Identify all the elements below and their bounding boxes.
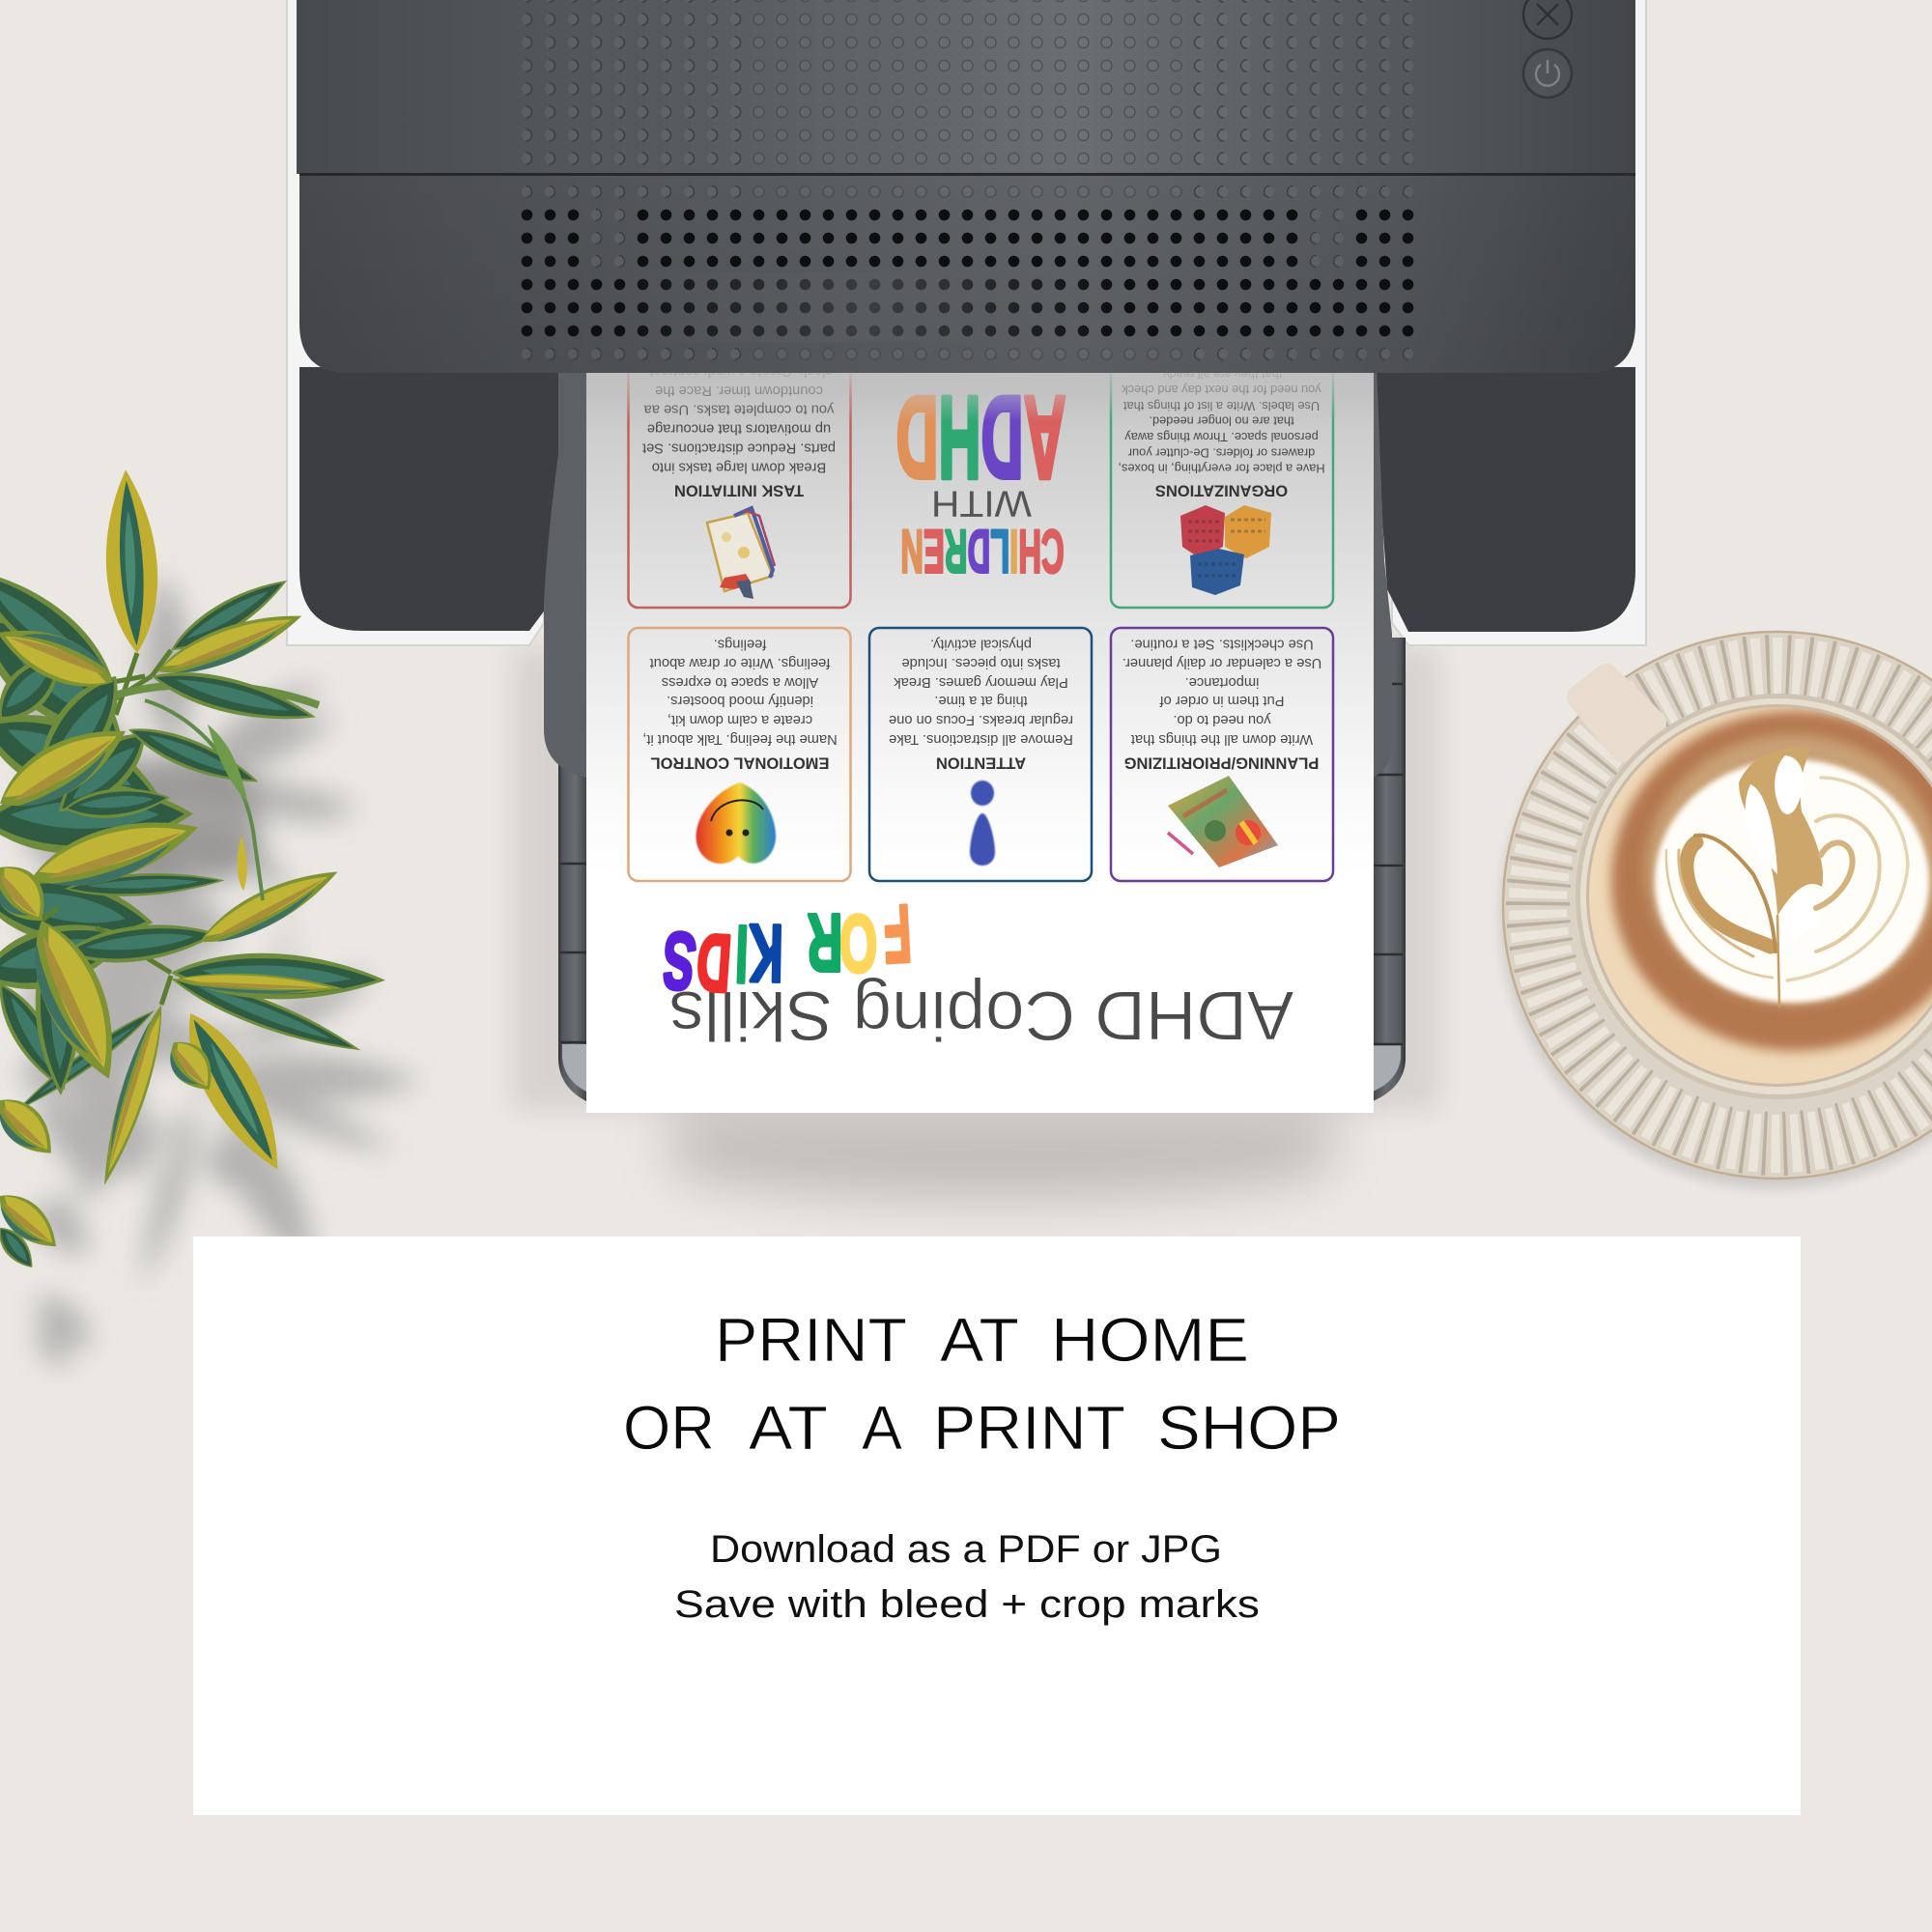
- heading: AT: [940, 1305, 1019, 1375]
- text: organizations: that they are all ready.: [1161, 367, 1282, 382]
- text: attention: physical activity.: [930, 636, 1032, 651]
- icon: power button: [1523, 49, 1572, 98]
- subheading: Save with bleed + crop marks: [674, 1583, 1260, 1626]
- icon: rainbow heart brain: [696, 782, 776, 864]
- text: emotional control: feelings. Write or draw about: [650, 655, 830, 670]
- card: attention: [869, 628, 1092, 881]
- title: for kids: F: [881, 888, 913, 979]
- title: for kids: K: [749, 907, 783, 999]
- printer right paper tray: [1373, 638, 1406, 1101]
- card: organizations: [1111, 348, 1333, 608]
- text: planning: Use checklists. Set a routine.: [1130, 636, 1314, 651]
- heading: PRINT: [933, 1393, 1125, 1463]
- card: planning: [1111, 628, 1333, 881]
- icon: cancel button: [1523, 0, 1572, 39]
- text: emotional control: create a calm down kit,: [668, 712, 812, 727]
- plant gap shadow: [106, 753, 261, 889]
- text: planning: Write down all the things that: [1131, 731, 1313, 747]
- top fade on paper: [627, 373, 1335, 418]
- plant: [0, 469, 386, 1274]
- text panel: [193, 1236, 1801, 1815]
- text: task initiation: countdown timer. Race the: [655, 383, 823, 398]
- title: for kids: I: [734, 908, 750, 999]
- text: attention: thing at a time.: [934, 693, 1028, 708]
- paper shadow: [667, 1111, 1343, 1199]
- text: organizations: personal space. Throw things away: [1124, 430, 1319, 444]
- text: emotional control: Name the feeling. Talk about it,: [642, 731, 838, 747]
- printer right wing: [1372, 367, 1635, 632]
- heading: A: [862, 1393, 902, 1463]
- text: emotional control: Allow a space to express: [662, 674, 818, 690]
- title: for kids: [663, 903, 911, 994]
- text: task initiation: you to complete tasks. Use aa: [643, 402, 834, 417]
- upper vent holes: [516, 0, 1420, 170]
- text: emotional control: identify mood boosters.: [667, 693, 813, 708]
- title: for kids: R: [808, 897, 842, 988]
- title: for kids: O: [838, 897, 878, 990]
- printer body: [544, 367, 1392, 778]
- text: organizations: Have a place for everything, in boxes,: [1118, 462, 1325, 475]
- printer: [287, 0, 1646, 1101]
- icon: clipboard: [707, 508, 775, 599]
- text: planning: Put them in order of: [1159, 693, 1285, 708]
- printer white backing: [287, 0, 1646, 645]
- text: emotional control: [642, 636, 838, 747]
- heading: PRINT: [715, 1305, 907, 1375]
- lower vent holes dark: [516, 203, 1420, 342]
- text: planning: you need to do.: [1173, 712, 1271, 727]
- text: planning: importance.: [1185, 674, 1259, 690]
- icon: notebook: [1168, 776, 1278, 867]
- heading: task initiation: TASK INITIATION: [674, 481, 804, 498]
- text: emotional control: feelings.: [714, 636, 766, 651]
- printer upper panel: [297, 0, 1635, 174]
- cup handle: [1579, 676, 1654, 750]
- latte art: [1666, 748, 1908, 1007]
- heading: SHOP: [1157, 1393, 1341, 1463]
- coffee: [1589, 707, 1932, 1084]
- heading: planning/prioritizing: PLANNING/PRIORITIZING: [1124, 753, 1319, 771]
- text: task initiation: [642, 363, 836, 475]
- card: emotional control: [628, 628, 850, 881]
- text: task initiation: up motivators that encourage: [647, 421, 831, 437]
- cup rim: [1576, 694, 1932, 1099]
- heading: emotional control: EMOTIONAL CONTROL: [651, 753, 829, 771]
- coffee cup: [193, 632, 1932, 1815]
- title: for kids: D: [694, 917, 734, 1009]
- word: with: WITH: [931, 483, 1032, 524]
- heading: HOME: [1051, 1305, 1249, 1375]
- latte foam: [1655, 759, 1929, 1003]
- title: ADHD coping skills: ADHD Coping Skills: [668, 977, 1294, 1054]
- icon: stacked blocks: [1180, 505, 1271, 595]
- heading: attention: ATTENTION: [936, 753, 1026, 771]
- text: task initiation: Break down large tasks into: [652, 460, 826, 475]
- printer left paper tray: [558, 744, 586, 1101]
- text: attention: Play memory games. Break: [894, 674, 1068, 690]
- saucer shadow: [1497, 798, 1932, 1192]
- card: task initiation: [628, 348, 850, 608]
- printer panel seam: [299, 173, 1635, 176]
- text: planning: Use a calendar or daily planner.: [1122, 655, 1321, 670]
- text: task initiation: clock. Create a work contract.: [645, 363, 833, 379]
- printer lower panel: [299, 176, 1635, 373]
- subheading: Download as a PDF or JPG: [710, 1528, 1222, 1571]
- heading: OR: [623, 1393, 715, 1463]
- paper background: [586, 373, 1374, 1113]
- text: task initiation: parts. Reduce distractions. Set: [642, 440, 836, 456]
- word: ADHD: ADHD: [895, 371, 1066, 502]
- saucer: [1503, 632, 1932, 1179]
- heading: [623, 1305, 1341, 1463]
- text: attention: regular breaks. Focus on one: [889, 712, 1073, 727]
- text: organizations: Use labels. Write a list of things that: [1122, 399, 1320, 413]
- printer shadow: [512, 647, 1439, 1111]
- text: organizations: that are no longer needed.: [1149, 413, 1294, 429]
- text: attention: tasks into pieces. Include: [901, 655, 1061, 670]
- text: organizations: you need for the next day and check: [1122, 383, 1321, 397]
- text: organizations: [1118, 367, 1325, 475]
- printed sheet: [586, 348, 1374, 1113]
- heading: organizations: ORGANIZATIONS: [1155, 481, 1288, 498]
- text: attention: Remove all distractions. Take: [889, 731, 1073, 747]
- heading: AT: [749, 1393, 828, 1463]
- subheading: [674, 1528, 1260, 1626]
- title: children with ADHD: [896, 394, 1066, 575]
- word: children: CHILDREN: [900, 517, 1065, 584]
- icon: letter i: [970, 781, 995, 866]
- text: attention: [889, 636, 1073, 747]
- title: for kids: S: [658, 914, 700, 1009]
- lower vent holes outline rows: [516, 180, 1420, 365]
- plant shadow: [0, 570, 423, 1376]
- text: planning: [1122, 636, 1321, 747]
- printer left wing: [299, 367, 560, 631]
- text: organizations: drawers or folders. De-clutter your: [1127, 446, 1315, 460]
